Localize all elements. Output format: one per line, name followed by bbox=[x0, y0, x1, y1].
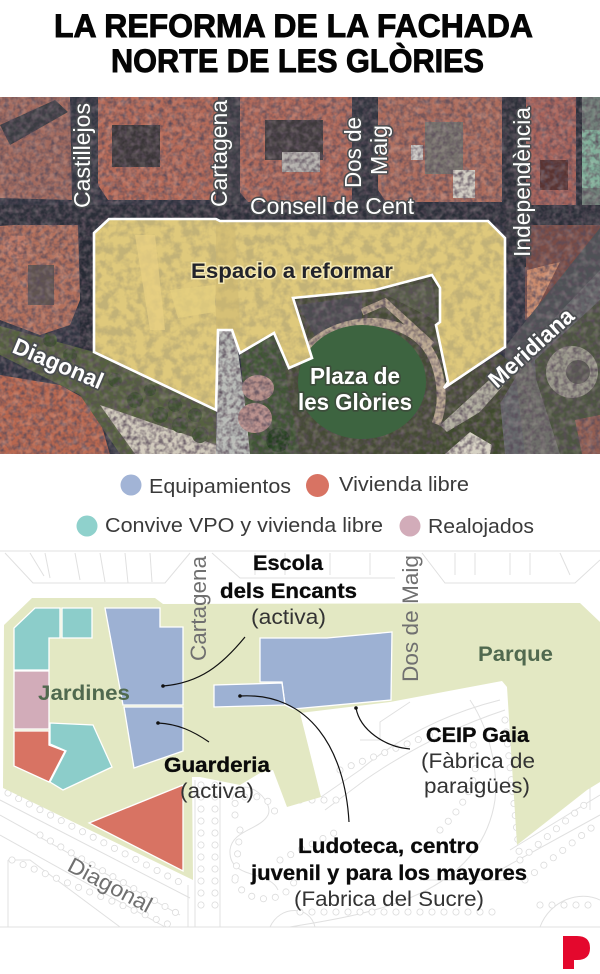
aerial street labels: Cartagena bbox=[206, 100, 232, 207]
label: CEIP Gaia bbox=[421, 724, 535, 798]
legend: vivienda libre: Vivienda libre bbox=[339, 474, 469, 496]
label: Plaza de les Glòries: Plaza de bbox=[310, 363, 400, 389]
plot: red triangle bbox=[89, 785, 183, 871]
label: Escola dels Encants bbox=[220, 552, 357, 629]
aerial plaza surroundings bbox=[285, 275, 520, 454]
plot: Guarderia bbox=[124, 707, 183, 768]
plot: teal south bbox=[50, 723, 112, 790]
leader: CEIP bbox=[354, 706, 410, 749]
label: Plaza de les Glòries bbox=[298, 363, 412, 415]
label: Escola dels Encants: Escola bbox=[253, 552, 323, 575]
label: Ludoteca: juvenil y para los mayores bbox=[250, 862, 527, 885]
label: Guarderia bbox=[164, 754, 270, 803]
title: LA REFORMA DE LA FACHADA bbox=[54, 8, 533, 44]
label: Espacio a reformar: Espacio a reformar bbox=[191, 260, 393, 283]
label: Parque: Parque bbox=[478, 643, 553, 666]
label: Plaza de les Glòries: les Glòries bbox=[298, 389, 412, 415]
aerial street labels: Maig bbox=[366, 125, 392, 175]
label: CEIP Gaia: (Fàbrica de bbox=[421, 750, 535, 773]
panel: aerial photo bbox=[0, 97, 600, 455]
label: CEIP Gaia: CEIP Gaia bbox=[426, 724, 529, 747]
aerial street labels bbox=[9, 100, 579, 394]
legend bbox=[76, 474, 534, 538]
legend: realojados: Realojados bbox=[428, 516, 534, 538]
aerial street labels: Consell de Cent bbox=[250, 193, 415, 219]
aerial right-hand roundabout bbox=[515, 300, 600, 454]
label: Escola dels Encants: dels Encants bbox=[220, 580, 357, 603]
leader: Ludoteca bbox=[238, 694, 349, 822]
title bbox=[54, 8, 533, 79]
leader: Guarderia bbox=[156, 721, 209, 742]
park area: green ground bbox=[3, 598, 600, 880]
aerial trees bbox=[43, 333, 208, 443]
title: NORTE DE LES GLÒRIES bbox=[111, 43, 484, 79]
label: Ludoteca: (Fabrica del Sucre) bbox=[294, 888, 484, 911]
plan street labels: Dos de Maig bbox=[398, 555, 423, 682]
panel: site plan base map bbox=[0, 551, 600, 927]
plot: teal square bbox=[62, 608, 92, 638]
legend: equipamientos: Equipamientos bbox=[149, 476, 291, 498]
label: Guarderia: Guarderia bbox=[164, 754, 270, 777]
label: CEIP Gaia: paraigües) bbox=[424, 775, 530, 798]
label: Ludoteca: Ludoteca, centro bbox=[298, 835, 479, 858]
aerial promenade and playground bbox=[216, 331, 300, 454]
aerial street labels: Independència bbox=[509, 107, 535, 257]
leader: Escola bbox=[161, 637, 245, 688]
aerial street labels: Dos de bbox=[340, 117, 366, 188]
area to reform: yellow polygon bbox=[90, 215, 510, 415]
plaza lawn bbox=[298, 325, 426, 439]
label: Jardines: Jardines bbox=[38, 682, 130, 705]
plan street labels: Diagonal bbox=[64, 852, 157, 918]
plot: red block bbox=[14, 731, 65, 782]
aerial streets bbox=[0, 97, 600, 454]
label: Ludoteca bbox=[250, 835, 527, 911]
aerial city blocks bbox=[0, 97, 600, 455]
legend: convive VPO: Convive VPO y vivienda libre bbox=[105, 515, 383, 537]
plan street labels bbox=[64, 555, 423, 918]
plot: Ludoteca bbox=[214, 683, 285, 707]
label: Guarderia: (activa) bbox=[180, 780, 254, 803]
label: Escola dels Encants: (activa) bbox=[251, 606, 326, 629]
aerial street labels: Diagonal bbox=[9, 333, 108, 394]
leader lines bbox=[156, 637, 410, 822]
icon: publisher logo bbox=[563, 936, 590, 969]
plot: Escola dels Encants bbox=[105, 608, 183, 705]
plan street labels: Cartagena bbox=[186, 555, 211, 661]
plot: teal L block bbox=[14, 608, 60, 670]
plot: rehoused pink bbox=[14, 671, 49, 729]
aerial texture bbox=[0, 97, 600, 454]
aerial street labels: Castillejos bbox=[69, 103, 95, 208]
plot: CEIP Gaia bbox=[260, 632, 392, 709]
aerial street labels: Meridiana bbox=[483, 302, 579, 393]
plots bbox=[14, 608, 392, 871]
